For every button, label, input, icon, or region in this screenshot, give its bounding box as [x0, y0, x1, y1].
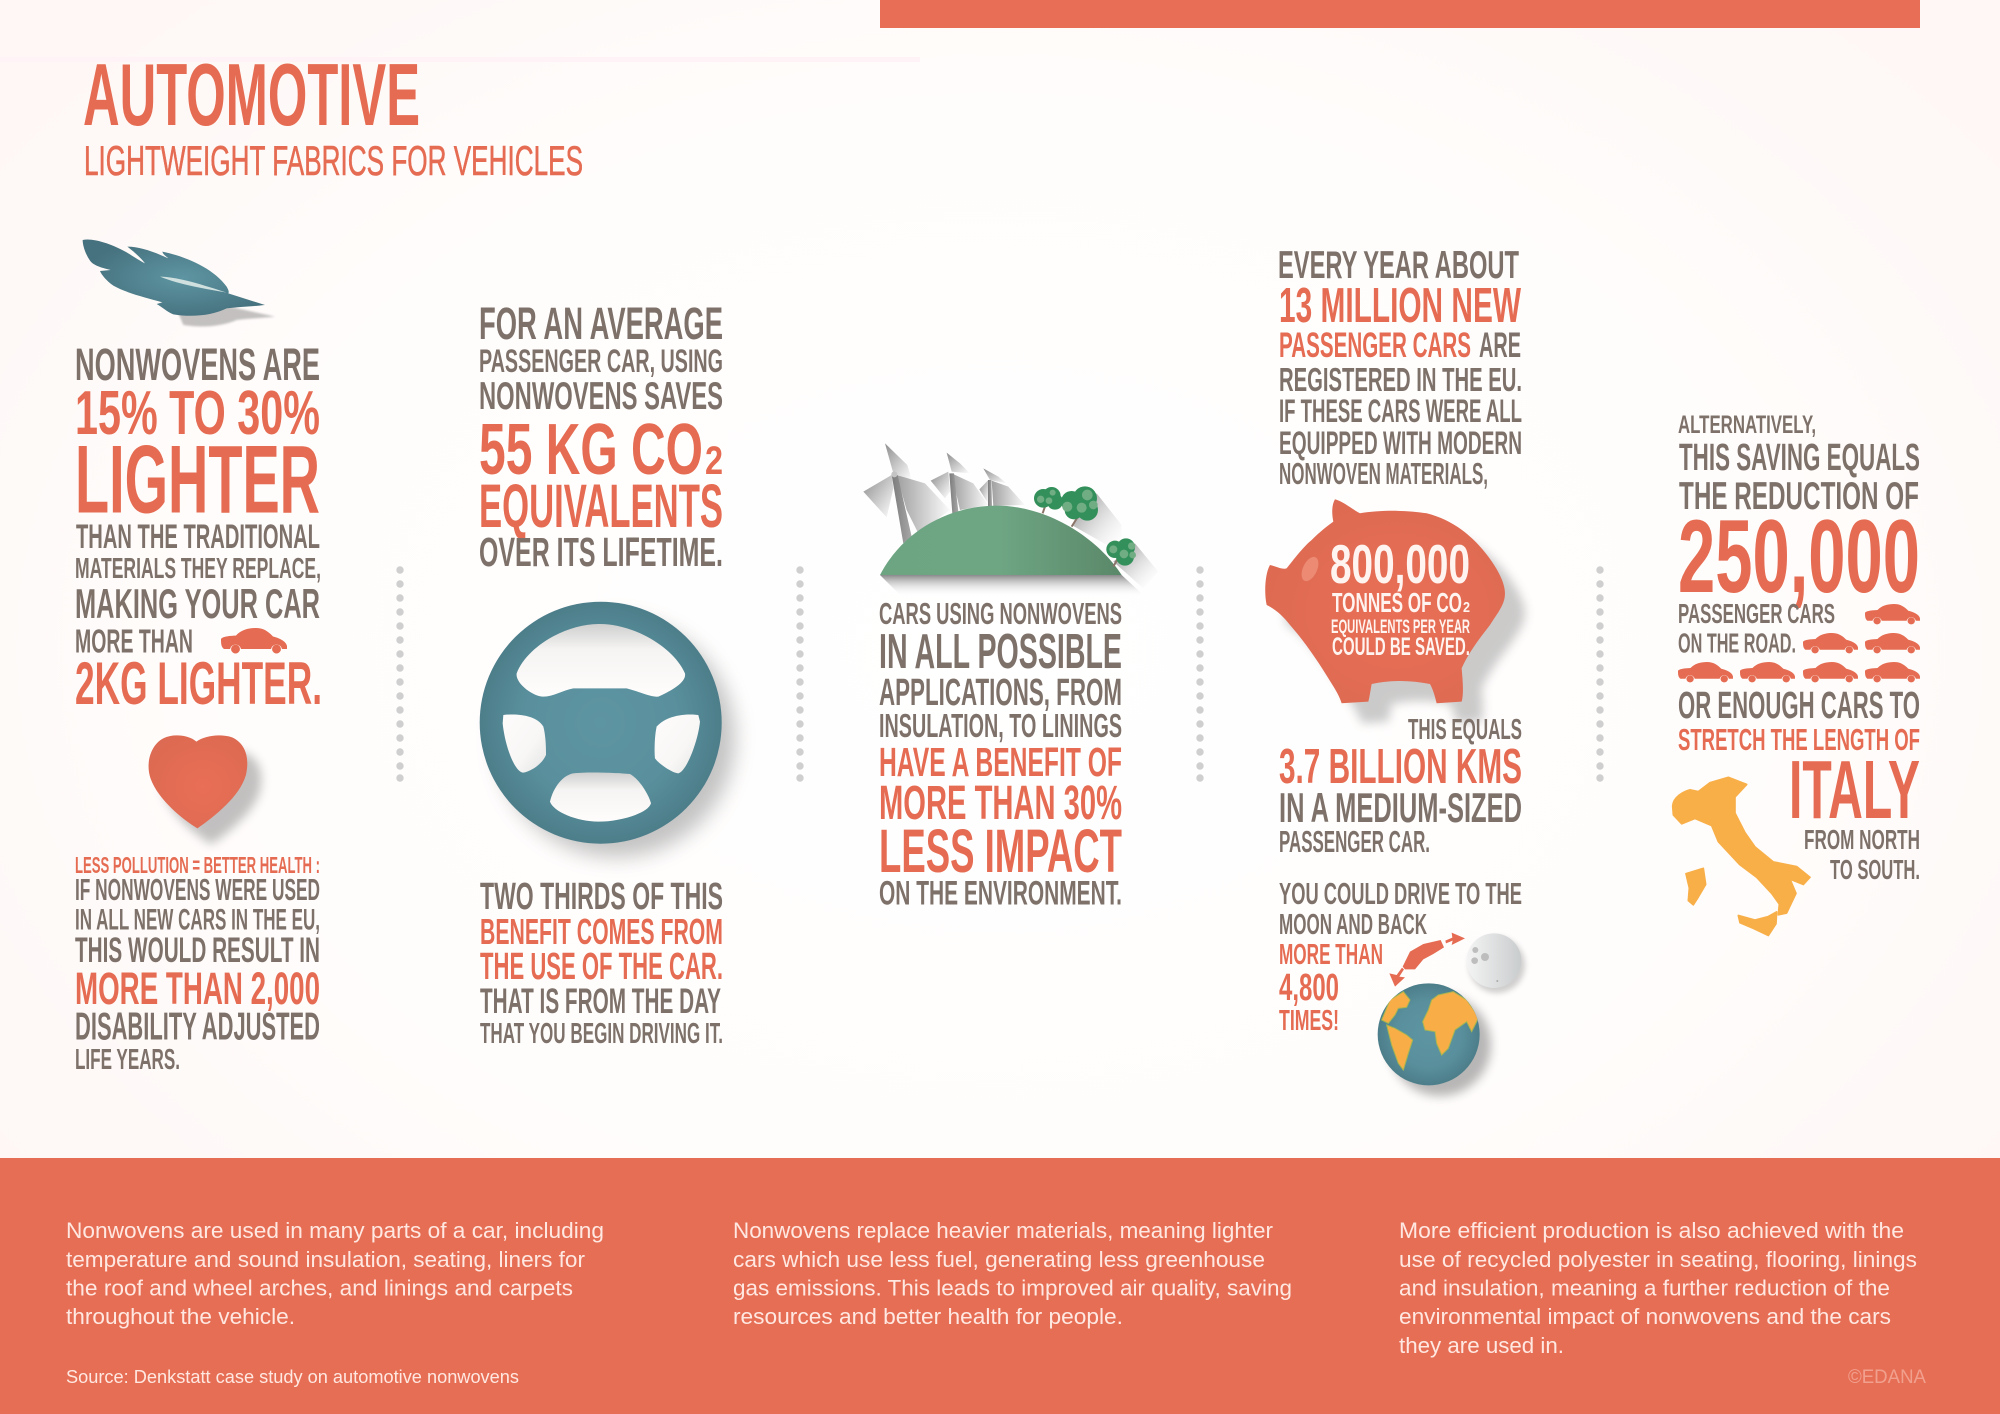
icon: feather — [83, 240, 275, 327]
icon: piggy bank — [1265, 499, 1525, 723]
text block: every year: NONWOVEN MATERIALS, — [1279, 457, 1488, 491]
text block: lighter: NONWOVENS ARE — [75, 339, 320, 390]
dotted divider 4 — [1596, 566, 1604, 782]
text block: two thirds: THE USE OF THE CAR. — [480, 946, 723, 988]
text block: better health: IF NONWOVENS WERE USED — [75, 873, 320, 907]
text block: better health: DISABILITY ADJUSTED — [75, 1006, 320, 1048]
text block: better health: IN ALL NEW CARS IN THE EU, — [75, 904, 320, 936]
footer text column 3: environmental impact of nonwovens and the cars — [1399, 1304, 1891, 1329]
text block: Italy: TO SOUTH. — [1830, 854, 1920, 885]
text block: less impact: LESS IMPACT — [879, 817, 1122, 885]
footer text column 1: temperature and sound insulation, seating, liners for — [66, 1247, 585, 1272]
text block: every year: ARE — [1479, 326, 1521, 365]
footer text column 3: use of recycled polyester in seating, flooring, linings — [1399, 1247, 1917, 1272]
text block: 250,000 — [1678, 412, 1920, 658]
text block: lighter: MAKING YOUR CAR — [75, 580, 320, 627]
footer text column 2: cars which use less fuel, generating less greenhouse — [733, 1247, 1265, 1272]
text block: two thirds: TWO THIRDS OF THIS — [480, 876, 723, 918]
text block: lighter: LIGHTER — [75, 426, 320, 534]
text block: better health: LESS POLLUTION = BETTER HEALTH : — [75, 852, 320, 878]
text block: moon and back: TIMES! — [1279, 1005, 1339, 1037]
text block: 55 kg CO2: 2 — [705, 439, 723, 483]
footer text column 3: and insulation, meaning a further reduction of the — [1399, 1276, 1890, 1300]
text block: two thirds: THAT IS FROM THE DAY — [480, 982, 721, 1021]
text block: 250,000: ALTERNATIVELY, — [1678, 412, 1816, 439]
text block: 55 kg CO2 — [479, 298, 723, 575]
dotted divider 1 — [396, 566, 404, 782]
text block: 55 kg CO2: 55 KG CO — [479, 410, 703, 490]
footer text column 2 — [733, 1218, 1292, 1329]
text block: better health — [75, 852, 320, 1076]
piggy bank text: TONNES OF CO — [1332, 587, 1462, 618]
text block: less impact: HAVE A BENEFIT OF — [879, 739, 1122, 785]
source note: Source: Denkstatt case study on automotive nonwovens — [66, 1367, 519, 1387]
text block: less impact: INSULATION, TO LININGS — [879, 707, 1122, 744]
panel: CO2 savings — [479, 298, 735, 1050]
text block: less impact: APPLICATIONS, FROM — [879, 672, 1122, 714]
text block: two thirds: BENEFIT COMES FROM — [480, 911, 723, 952]
text block: every year: EVERY YEAR ABOUT — [1278, 244, 1519, 287]
text block: 55 kg CO2: NONWOVENS SAVES — [479, 375, 723, 418]
text block: every year: IF THESE CARS WERE ALL — [1279, 393, 1522, 429]
piggy bank text: 2 — [1463, 599, 1470, 616]
footer background — [0, 1158, 2000, 1414]
text block: moon and back: MOON AND BACK — [1279, 909, 1427, 941]
panel: 250,000 cars and Italy — [1673, 412, 1920, 935]
text block: 250,000: PASSENGER CARS — [1678, 598, 1835, 629]
text block: less impact: ON THE ENVIRONMENT. — [879, 874, 1122, 912]
text block: 3.7 billion kms: THIS EQUALS — [1408, 714, 1522, 746]
text block: 55 kg CO2: FOR AN AVERAGE — [479, 298, 723, 349]
text block: Italy — [1678, 685, 1920, 885]
footer text column 3: they are used in. — [1399, 1333, 1564, 1358]
footer text column 1: Nonwovens are used in many parts of a car, including — [66, 1218, 604, 1243]
footer text column 3 — [1399, 1218, 1917, 1358]
text block: lighter: MATERIALS THEY REPLACE, — [75, 553, 321, 585]
text block: every year — [1278, 244, 1522, 491]
text block: two thirds: THAT YOU BEGIN DRIVING IT. — [480, 1018, 723, 1050]
dotted divider 3 — [1196, 566, 1204, 782]
icon: heart — [149, 735, 261, 844]
piggy bank text — [1330, 533, 1470, 661]
title block — [83, 45, 583, 184]
text block: better health: THIS WOULD RESULT IN — [75, 931, 320, 970]
text block: 55 kg CO2: EQUIVALENTS — [479, 472, 723, 540]
icon: row of cars — [1678, 604, 1920, 682]
footer panel — [0, 1158, 2000, 1414]
piggy bank text: COULD BE SAVED. — [1332, 634, 1470, 661]
title: AUTOMOTIVE — [83, 45, 420, 144]
panel: environment — [863, 443, 1158, 912]
dotted divider 2 — [796, 566, 804, 782]
piggy bank text: EQUIVALENTS PER YEAR — [1331, 617, 1470, 638]
text block: every year: 13 MILLION NEW — [1279, 278, 1521, 333]
text block: less impact — [879, 597, 1122, 912]
piggy bank text: 800,000 — [1330, 533, 1470, 595]
text block: lighter: 2KG LIGHTER. — [75, 650, 322, 717]
text block: lighter: THAN THE TRADITIONAL — [76, 518, 320, 556]
text block: less impact: MORE THAN 30% — [879, 777, 1122, 830]
text block: 3.7 billion kms: 3.7 BILLION KMS — [1279, 739, 1522, 794]
text block: moon and back: 4,800 — [1279, 967, 1339, 1009]
icon: map of Italy — [1673, 777, 1810, 935]
footer text column 2: resources and better health for people. — [733, 1304, 1123, 1329]
footer text column 1: throughout the vehicle. — [66, 1304, 295, 1329]
text block: better health: LIFE YEARS. — [75, 1044, 180, 1076]
text block: 3.7 billion kms: PASSENGER CAR. — [1279, 825, 1430, 859]
footer text column 1 — [66, 1218, 604, 1329]
text block: better health: MORE THAN 2,000 — [75, 963, 320, 1014]
text block: every year: PASSENGER CARS — [1279, 326, 1471, 365]
text block: two thirds — [480, 876, 723, 1050]
icon: wind turbines and hill — [863, 443, 1158, 597]
text block: less impact: IN ALL POSSIBLE — [879, 625, 1122, 679]
icon: moon, earth and arrow — [1378, 933, 1525, 1096]
text block: lighter: MORE THAN — [75, 624, 193, 661]
text block: 3.7 billion kms: IN A MEDIUM-SIZED — [1279, 784, 1522, 831]
text block: moon and back: MORE THAN — [1279, 939, 1383, 971]
text block: 55 kg CO2: PASSENGER CAR, USING — [479, 343, 723, 379]
text block: 250,000: ON THE ROAD. — [1678, 628, 1796, 658]
panel: lighter cars — [75, 240, 322, 1076]
footer text column 2: Nonwovens replace heavier materials, meaning lighter — [733, 1218, 1273, 1243]
footer text column 3: More efficient production is also achieved with the — [1399, 1218, 1904, 1243]
text block: every year: EQUIPPED WITH MODERN — [1279, 425, 1522, 461]
copyright: ©EDANA — [1848, 1367, 1926, 1388]
footer text column 2: gas emissions. This leads to improved air quality, saving — [733, 1276, 1292, 1300]
text block: 55 kg CO2: OVER ITS LIFETIME. — [479, 529, 723, 575]
text block: every year: REGISTERED IN THE EU. — [1279, 362, 1522, 399]
text block: Italy: FROM NORTH — [1804, 824, 1920, 855]
icon: car — [221, 628, 287, 654]
panel: 13 million cars — [1265, 244, 1525, 1096]
footer text column 1: the roof and wheel arches, and linings and carpets — [66, 1276, 573, 1300]
top colour bar — [880, 0, 1920, 28]
text block: moon and back — [1279, 877, 1522, 1037]
text block: lighter — [75, 339, 322, 717]
text block: 3.7 billion kms — [1279, 714, 1522, 859]
text block: moon and back: YOU COULD DRIVE TO THE — [1279, 877, 1522, 911]
icon: steering wheel — [480, 602, 735, 857]
subtitle: LIGHTWEIGHT FABRICS FOR VEHICLES — [84, 137, 583, 184]
text block: lighter: 15% TO 30% — [75, 378, 320, 448]
text block: less impact: CARS USING NONWOVENS — [879, 597, 1122, 631]
